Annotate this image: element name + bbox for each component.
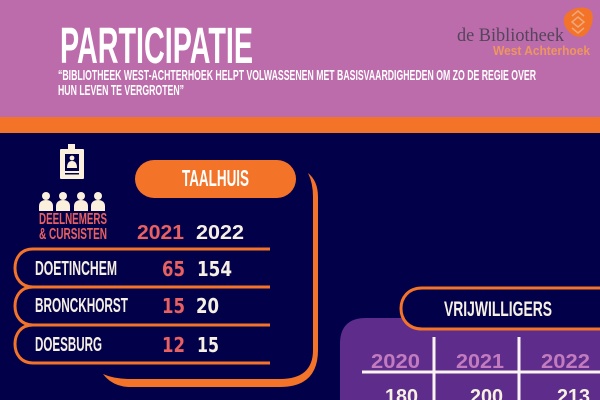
- row: Doesburg: DOESBURG: [35, 334, 102, 356]
- table grid: [362, 337, 600, 400]
- row outlines: [15, 249, 270, 363]
- table years: 2020: [371, 351, 420, 373]
- row: Doetinchem: [35, 257, 232, 281]
- heading pill: [401, 288, 600, 329]
- row: Doesburg: 12: [162, 333, 185, 357]
- row: Doetinchem: DOETINCHEM: [35, 258, 117, 280]
- heading pill: TAALHUIS: [182, 165, 249, 191]
- row: Doesburg: [35, 333, 219, 357]
- panel: Taalhuis: [15, 160, 318, 387]
- table years: 2021: [456, 351, 504, 373]
- table years: [371, 351, 590, 373]
- title: PARTICIPATIE: [60, 17, 253, 74]
- logo: de Bibliotheek West Achterhoek: West Achterhoek: [493, 43, 591, 58]
- subtitle: HUN LEVEN TE VERGROTEN”: [58, 82, 184, 99]
- row: Doetinchem: 154: [197, 257, 232, 281]
- row: Doetinchem: 65: [162, 257, 185, 281]
- participants label: & CURSISTEN: [39, 226, 107, 243]
- icon: participants group: [39, 192, 105, 211]
- bracket frame: [103, 173, 318, 387]
- header panel: [0, 0, 600, 133]
- table years: 2022: [541, 351, 590, 373]
- participants label: [39, 211, 107, 243]
- row: Bronckhorst: BRONCKHORST: [35, 295, 128, 317]
- year headers: [137, 222, 244, 244]
- table values: [385, 386, 590, 400]
- year headers: 2022: [196, 222, 244, 244]
- row: Bronckhorst: 15: [162, 294, 185, 318]
- participants label: DEELNEMERS: [39, 211, 107, 228]
- icon: badge: [60, 144, 84, 179]
- year headers: 2021: [137, 222, 184, 244]
- row: Doesburg: 15: [197, 333, 219, 357]
- logo: de Bibliotheek West Achterhoek: [457, 7, 593, 58]
- icon: library logo mark: [564, 7, 593, 37]
- panel: Vrijwilligers table: [340, 288, 600, 400]
- heading pill: [135, 160, 296, 198]
- logo: de Bibliotheek West Achterhoek: de Bibliotheek: [457, 25, 564, 46]
- subtitle: [58, 67, 536, 99]
- row: Bronckhorst: 20: [196, 294, 219, 318]
